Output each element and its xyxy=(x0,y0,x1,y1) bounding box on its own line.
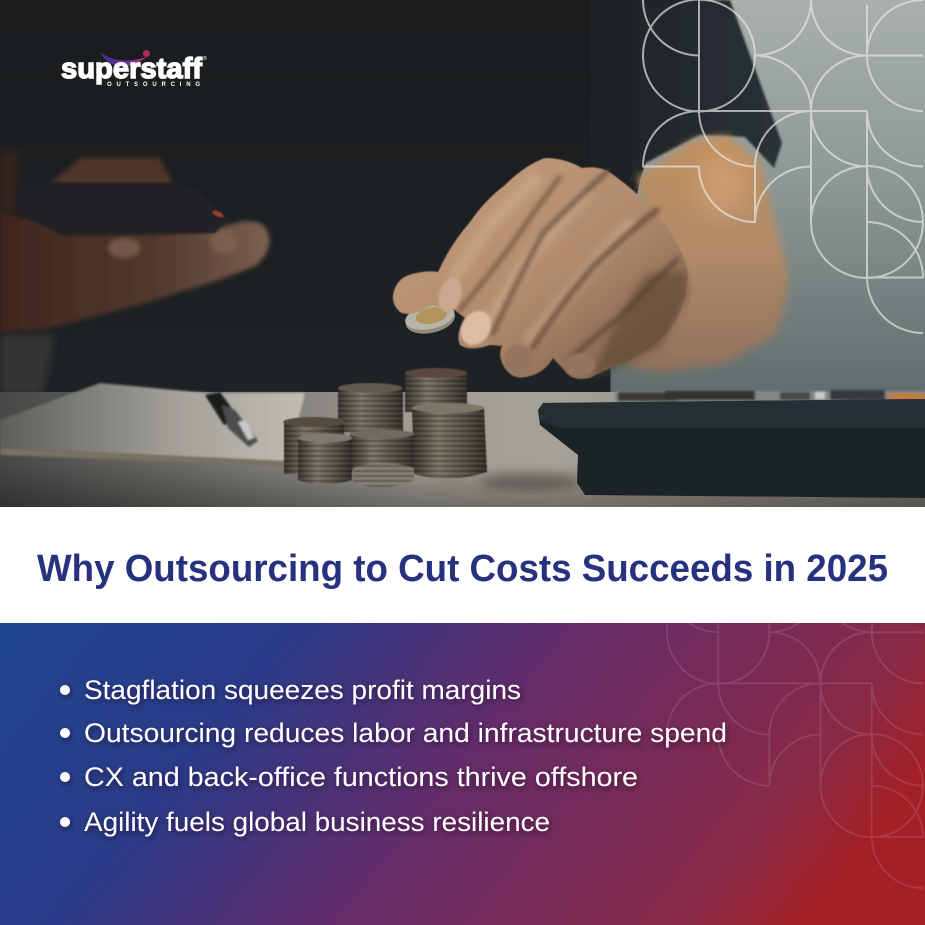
smartphone xyxy=(15,183,228,233)
logo dot xyxy=(143,50,150,57)
left hand palm and fingers xyxy=(0,212,269,332)
forearm xyxy=(600,135,788,373)
notebook edge xyxy=(0,448,285,466)
coin stack right xyxy=(412,403,487,479)
coin stack back right xyxy=(405,368,467,412)
bullet 1: Stagflation squeezes profit margins xyxy=(84,675,521,705)
table xyxy=(0,392,925,507)
table shadow xyxy=(480,474,580,490)
pen xyxy=(205,392,258,447)
decorative line pattern on panel xyxy=(666,623,924,889)
coin stack left xyxy=(283,417,345,474)
logo tagline: OUTSOURCING xyxy=(107,82,200,88)
title: Why Outsourcing to Cut Costs Succeeds in 2025 xyxy=(37,548,888,590)
dark shirt xyxy=(590,0,782,395)
held coin xyxy=(405,304,455,334)
coin stack front left xyxy=(298,434,352,484)
left sleeve xyxy=(0,335,55,395)
notebook xyxy=(0,383,305,462)
logo wordmark: superstaff xyxy=(61,53,202,85)
bullet 4: Agility fuels global business resilience xyxy=(84,807,550,837)
calculator top face xyxy=(538,399,925,428)
decorative line pattern on photo xyxy=(643,0,923,333)
key points list xyxy=(60,675,727,837)
photo: hands counting coins beside a calculator xyxy=(0,0,925,507)
bullet 3: CX and back-office functions thrive offshore xyxy=(84,762,638,792)
bullet 2: Outsourcing reduces labor and infrastructure spend xyxy=(84,718,727,748)
registered mark: ® xyxy=(203,55,207,62)
calculator body xyxy=(538,399,925,498)
finger nails xyxy=(435,275,595,377)
coin stack centre xyxy=(350,430,414,474)
calculator keys xyxy=(615,390,925,403)
finger highlights xyxy=(455,180,630,340)
right hand xyxy=(393,158,688,379)
left wrist shade xyxy=(0,150,18,214)
phone button xyxy=(212,210,224,218)
logo swoosh xyxy=(100,52,146,67)
table bottom fade xyxy=(0,470,925,507)
coin stack back centre xyxy=(338,383,403,432)
fingernails left hand xyxy=(108,230,238,258)
coin stacks xyxy=(283,368,487,488)
left hand behind phone xyxy=(50,158,174,186)
forearm highlight xyxy=(696,155,748,215)
finger creases xyxy=(460,172,677,360)
title band xyxy=(0,507,925,623)
brand logo xyxy=(61,50,207,88)
coin stack front small xyxy=(353,463,414,488)
gradient panel xyxy=(0,623,925,925)
hand shade xyxy=(592,270,688,378)
wall background xyxy=(610,0,925,410)
